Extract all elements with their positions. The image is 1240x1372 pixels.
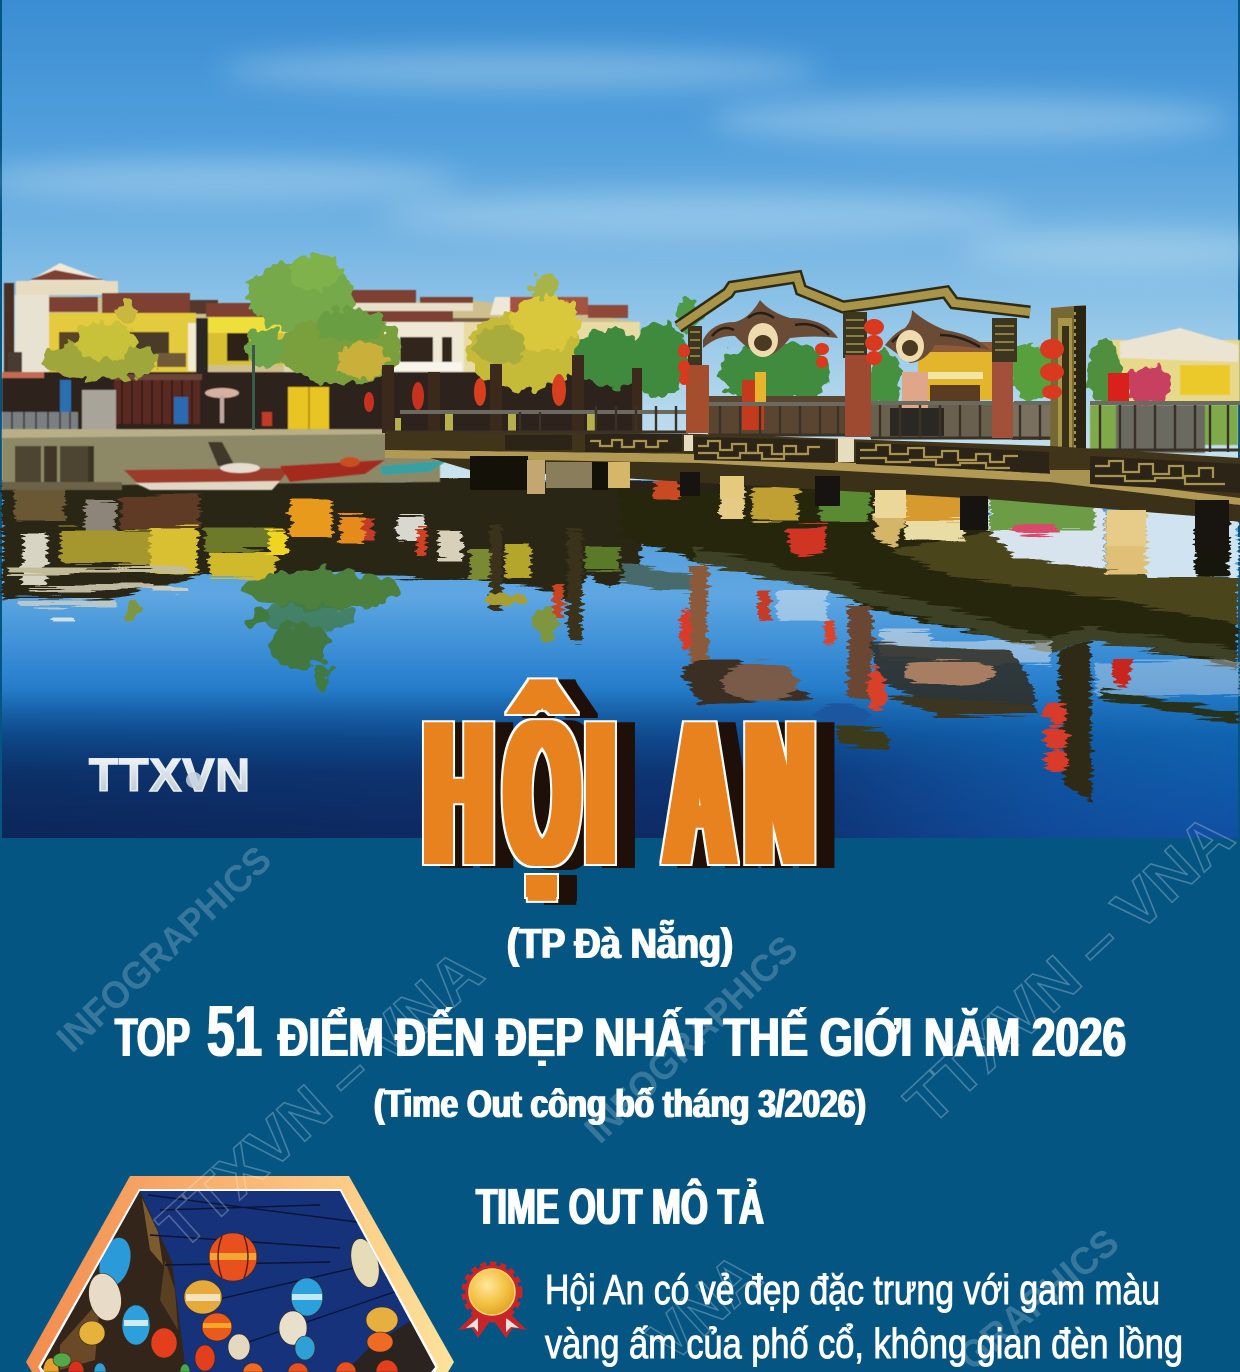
photo: riverside quay and boats <box>2 429 448 490</box>
photo: old town houses <box>2 263 642 440</box>
bridge: people on the deck <box>742 372 944 436</box>
house: ground floor shops <box>2 372 642 440</box>
house: yellow terrace <box>49 313 380 373</box>
watermark: INFOGRAPHICS centre: INFOGRAPHICS <box>577 928 806 1151</box>
house: left tower <box>4 263 118 413</box>
icon: boats <box>124 457 448 490</box>
photo: reflections of the old town <box>2 480 640 642</box>
heading: Time Out description: TIME OUT MÔ TẢ <box>476 1177 764 1235</box>
title: HOI AN <box>426 678 813 908</box>
photo: lantern posts on the bank <box>252 345 642 433</box>
watermarks <box>49 801 1240 1372</box>
bridge: red lanterns <box>678 319 1064 399</box>
house: backing wall <box>15 295 640 375</box>
icon: gold medal <box>458 1264 527 1338</box>
house: white balcony <box>380 322 640 372</box>
photo: sky <box>0 0 1240 480</box>
subtitle: city: (TP Đà Nẵng) <box>507 919 733 968</box>
photo: trees along the river <box>42 254 700 398</box>
bridge: decorated deck panels <box>385 432 1240 505</box>
heading: top 51 <box>115 992 1126 1072</box>
bridge: carved scrolls and medallions <box>703 300 990 363</box>
bridge: pillars <box>686 312 1017 438</box>
bridge: dark space under the arches <box>708 396 1052 440</box>
bridge: tower post <box>1050 305 1086 480</box>
watermark: VNA lower: VNA <box>635 1240 774 1372</box>
photo: reflected tree <box>125 570 557 687</box>
hero photo: Hoi An bridge and old town <box>0 0 1240 838</box>
heading: top 51: 51 <box>207 992 262 1072</box>
bridge: railing <box>386 403 1240 452</box>
bridge: ornamental arches <box>678 277 1030 327</box>
bridge: under-deck and piers <box>430 456 1240 550</box>
photo: water <box>2 480 1238 838</box>
heading: top 51: TOP <box>115 1006 190 1068</box>
photo: background houses on the right <box>1090 328 1240 453</box>
photo: reflected bridge <box>620 480 1240 802</box>
watermark: INFOGRAPHICS: INFOGRAPHICS <box>49 839 280 1061</box>
text block: description <box>545 1266 1183 1367</box>
lanterns <box>43 1233 398 1372</box>
watermark: TTXVN VNA right: TTXVN – VNA <box>892 801 1240 1138</box>
house: roofs <box>49 290 628 328</box>
title: HOI AN: AN <box>667 678 813 908</box>
photo: Cau An Hoi bridge <box>385 277 1240 550</box>
logo: TTXVN: TTXVN <box>89 749 251 801</box>
frame: white border <box>38 1189 438 1372</box>
bridge: yellow house behind <box>918 342 992 403</box>
title: HOI AN: HỘI <box>426 678 613 908</box>
photo: person in red <box>1108 373 1129 403</box>
frame: orange hexagon <box>26 1176 454 1372</box>
photo: trees and flowers on the right <box>1087 340 1172 404</box>
subheading: source: (Time Out công bố tháng 3/2026) <box>374 1083 866 1126</box>
watermark: TTXVN VNA: TTXVN – VNA <box>145 937 496 1262</box>
bridge: greenery behind <box>719 342 1050 408</box>
photo: night street with lanterns <box>38 1188 438 1372</box>
panel: hexagon lantern photo <box>26 1176 454 1372</box>
